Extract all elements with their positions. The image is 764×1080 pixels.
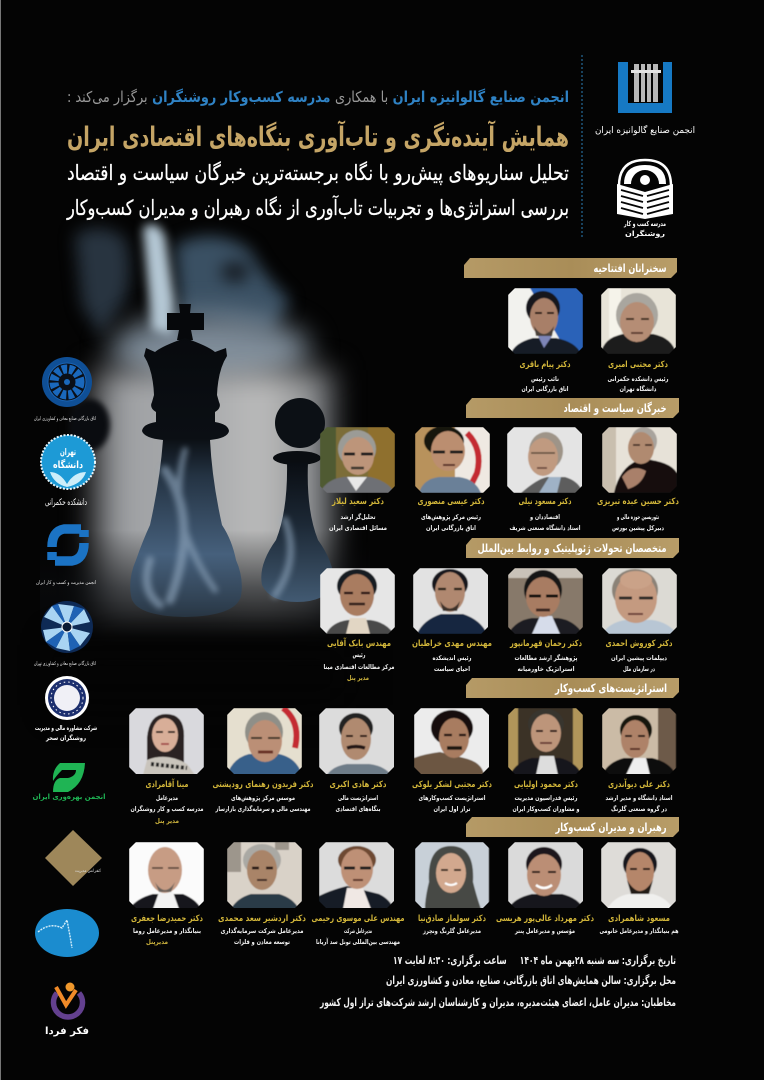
caption: شرکت مشاوره مالی و مدیریت: [35, 724, 97, 732]
name: دکتر عیسی منصوری: [418, 497, 485, 507]
logo: university of Tehran: تهران: [60, 448, 76, 458]
role: هم بنیانگذار و مدیرعامل خانومی: [600, 927, 679, 935]
name: دکتر محمود اولیایی: [514, 780, 578, 790]
role: مدیرعامل: [156, 794, 178, 802]
logo: blue ellipse: [35, 909, 99, 957]
logo: university of Tehran: دانشگاه: [53, 458, 83, 471]
speaker: Amiri: [601, 288, 676, 393]
speaker: Nili: [507, 427, 583, 532]
background: smoke and chess pieces: [40, 224, 370, 705]
role: رئیس فدراسیون مدیریت: [514, 794, 578, 802]
name: دکتر اردشیر سعد محمدی: [218, 914, 306, 924]
logo caption: انجمن صنایع گالوانیزه ایران: [595, 124, 695, 136]
logo: gold diamond: [45, 830, 102, 886]
role: دیپلمات پیشین ایران: [611, 654, 668, 662]
photo: [508, 842, 584, 909]
role: استراتژیک خاورمیانه: [518, 665, 574, 673]
photo: [601, 288, 676, 354]
caption: کنفرانس مدیریت: [75, 868, 102, 874]
speaker: Aghaei: [320, 568, 395, 682]
role: مدیرعامل شرکت سرمایه‌گذاری: [220, 927, 304, 935]
name: دکتر پیام باقری: [520, 360, 571, 370]
name: دکتر رحمان قهرمانپور: [509, 639, 582, 649]
name: مینا آقامرادی: [146, 778, 188, 790]
subtitle line 2: بررسی استراتژی‌ها و تجربیات تاب‌آوری از نگاه رهبران و مدیران کسب‌وکار: [66, 195, 569, 220]
role: دانشگاه تهران: [620, 385, 657, 393]
role: اتاق بازرگانی ایران: [426, 524, 476, 532]
role: دبیرکل پیشین بورس: [612, 524, 664, 532]
panel moderator tag: مدیرپنل: [146, 938, 168, 946]
logo: blue cross: [36, 529, 96, 586]
photo: [508, 288, 583, 354]
banner: [466, 817, 679, 837]
role: در سازمان ملل: [623, 665, 655, 673]
banner: [466, 538, 679, 558]
section: opening speakers: [464, 258, 677, 393]
divider: dotted line: [581, 55, 583, 237]
photo: [507, 427, 583, 493]
speaker: Aghamoradi: [129, 708, 204, 825]
photo: [413, 568, 489, 634]
role: مسائل اقتصادی ایران: [329, 524, 387, 532]
photo: [320, 568, 395, 634]
sponsor logos column: [32, 357, 106, 1037]
role: مدیرعامل شرکت: [344, 927, 372, 935]
role: بنگاه‌های اقتصادی: [336, 805, 380, 813]
subtitle line 1: تحلیل سناریوهای پیش‌رو با نگاه برجسته‌ترین خبرگان سیاست و اقتصاد: [67, 161, 569, 185]
logo: chamber of commerce: [34, 357, 96, 422]
role: رئیس دانشکده حکمرانی: [608, 375, 669, 383]
speaker: Leylaz: [320, 427, 395, 532]
speaker: Saad Mohammadi: [218, 842, 306, 946]
speaker: Rahnamay Roodposhti: [212, 708, 314, 813]
speaker: Alipour Harisi: [496, 842, 594, 935]
caption: اتاق بازرگانی صنایع معادن و کشاورزی تهران: [34, 660, 96, 667]
speaker: Ghahremanpour: [508, 568, 583, 673]
role: پژوهشگر ارشد مطالعات: [514, 654, 578, 662]
role: در گروه صنعتی گلرنگ: [611, 804, 667, 813]
speaker: Divandari: [602, 708, 676, 813]
photo: [129, 708, 204, 775]
role: مرکز مطالعات اقتصادی مینا: [324, 663, 394, 671]
panel moderator tag: مدیر پنل: [155, 817, 179, 825]
speaker: Abdeh Tabrizi: [597, 427, 679, 532]
role: مدرسه کسب و کار روشنگران: [130, 805, 204, 813]
banner: [466, 678, 679, 698]
logo caption: روشنگران: [625, 229, 665, 238]
role: مهندسی بین‌المللی تونل سد آریانا: [316, 937, 400, 946]
name: دکتر حمیدرضا جعفری: [131, 914, 203, 924]
name: مهندس مهدی خراطیان: [412, 639, 492, 649]
role: بنیانگذار و مدیرعامل روما: [133, 927, 201, 935]
banner: استراتژیست‌های کسب‌وکار: [554, 681, 667, 696]
photo: [129, 842, 204, 909]
name: دکتر هادی اکبری: [330, 780, 387, 790]
photo: [319, 708, 396, 775]
speaker: Bagheri: [508, 288, 583, 393]
speaker: Lashkarbolouki: [412, 708, 492, 813]
speaker: Sadeghnia: [415, 842, 489, 935]
photo: [415, 426, 490, 493]
name: مهندس علی موسوی رحیمی: [312, 914, 404, 924]
role: رئیس: [352, 651, 366, 659]
role: استاد دانشگاه صنعتی شریف: [510, 524, 580, 532]
section: politics and economy experts: [320, 398, 679, 532]
caption: فکر فردا: [45, 1026, 89, 1037]
name: دکتر مهرداد عالی‌پور هریسی: [496, 914, 594, 924]
name: دکتر کوروش احمدی: [606, 639, 673, 649]
role: مؤسس و مدیرعامل پنتر: [514, 927, 575, 935]
role: استراتژیست کسب‌وکارهای: [418, 794, 486, 802]
photo: [602, 708, 676, 775]
photo: [508, 708, 583, 775]
chess king: [130, 304, 242, 617]
speaker: Olyaei: [508, 708, 583, 813]
photo: [508, 568, 583, 634]
photo: [414, 708, 490, 775]
logo: business school: [617, 160, 673, 238]
role: اقتصاددان و: [529, 513, 560, 521]
name: دکتر مسعود نیلی: [518, 497, 572, 507]
name: دکتر حسین عبده تبریزی: [597, 497, 679, 507]
role: استاد دانشگاه و مدیر ارشد: [606, 794, 672, 802]
photo: [601, 842, 676, 909]
logo caption: مدرسه کسب و کار: [623, 220, 666, 228]
name: دکتر مجتبی امیری: [608, 360, 668, 370]
event details: [319, 954, 676, 1009]
role: تراز اول ایران: [434, 805, 470, 813]
date and time: تاریخ برگزاری: سه شنبه ۲۸بهمن ماه ۱۴۰۴ ساعت برگزاری: ۸:۳۰ لغایت ۱۷: [393, 954, 676, 967]
role: رئیس اندیشکده: [432, 654, 472, 662]
photo: [319, 842, 396, 909]
role: رئیس مرکز پژوهش‌های: [421, 513, 481, 521]
role: توسعه معادن و فلزات: [234, 938, 290, 946]
photo: [320, 427, 395, 493]
photo: [602, 568, 677, 634]
speaker: Kharatian: [412, 568, 492, 673]
logo: Roshangaran Sahar: [35, 676, 97, 742]
caption: انجمن مدیریت و کسب و کار ایران: [36, 580, 96, 586]
section: geopolitics experts: [320, 538, 679, 682]
photo: [227, 842, 302, 909]
logo: Fekr Farda: [45, 982, 89, 1037]
banner: متخصصان تحولات ژئوپلیتیک و روابط بین‌الملل: [478, 541, 666, 556]
caption: دانشکده حکمرانی: [45, 498, 87, 508]
logo: university of Tehran: [41, 435, 95, 508]
speaker: Ahmadi: [602, 568, 677, 673]
role: مهندسی مالی و سرمایه‌گذاری بازارساز: [215, 805, 310, 813]
logo: turbine: [34, 601, 96, 667]
role: مدیرعامل گلرنگ ونچرز: [422, 926, 481, 935]
photo: [415, 842, 489, 909]
banner: خبرگان سیاست و اقتصاد: [564, 401, 666, 416]
name: دکتر سعید لیلاز: [331, 497, 384, 507]
role: تئوریسین حوزه مالی و: [616, 513, 659, 521]
role: اتاق بازرگانی ایران: [522, 385, 568, 393]
role: تحلیل‌گر ارشد: [340, 513, 376, 521]
speaker: Akbari: [319, 708, 396, 813]
speaker: Mansouri: [415, 426, 490, 532]
name: مهندس بابک آقایی: [327, 637, 391, 649]
panel moderator tag: مدیر پنل: [347, 674, 369, 682]
role: نائب رئیس: [531, 375, 559, 383]
name: مسعود شاهمرادی: [608, 914, 670, 924]
logo: galvanizing association: [595, 62, 695, 136]
banner: رهبران و مدیران کسب‌وکار: [555, 820, 666, 835]
caption: روشنگران سحر: [45, 734, 86, 742]
chess pawn: [261, 398, 333, 602]
section: business strategists: [129, 678, 679, 825]
speaker: Shahmoradi: [600, 842, 679, 935]
name: دکتر علی دیوآندری: [608, 778, 670, 790]
banner: [464, 258, 677, 278]
banner: [466, 398, 679, 418]
photo: [602, 427, 677, 493]
speaker: Mousavi Rahimi: [312, 842, 404, 946]
caption: انجمن بهره‌وری ایران: [32, 793, 106, 801]
role: احیای سیاست: [434, 665, 470, 673]
name: دکتر مجتبی لشکر بلوکی: [412, 780, 492, 790]
section: business leaders and managers: [129, 817, 679, 946]
logo: productivity association: [32, 763, 106, 801]
speaker: Jafari: [129, 842, 204, 946]
banner: سخنرانان افتتاحیه: [594, 261, 666, 275]
name: دکتر فریدون رهنمای رودپشتی: [212, 780, 314, 790]
caption: اتاق بازرگانی صنایع معادن و کشاورزی ایران: [34, 415, 96, 422]
title: همایش آینده‌نگری و تاب‌آوری بنگاه‌های اقتصادی ایران: [67, 120, 569, 153]
role: موسس مرکز پژوهش‌های: [231, 794, 295, 802]
photo: [227, 708, 302, 775]
intro line: انجمن صنایع گالوانیزه ایران با همکاری مدرسه کسب‌وکار روشنگران برگزار می‌کند :: [67, 88, 569, 106]
role: و مشاوران کسب‌وکار ایران: [512, 805, 580, 813]
role: استراتژیست مالی: [338, 794, 378, 802]
name: دکتر سولماز صادق‌نیا: [418, 914, 486, 924]
